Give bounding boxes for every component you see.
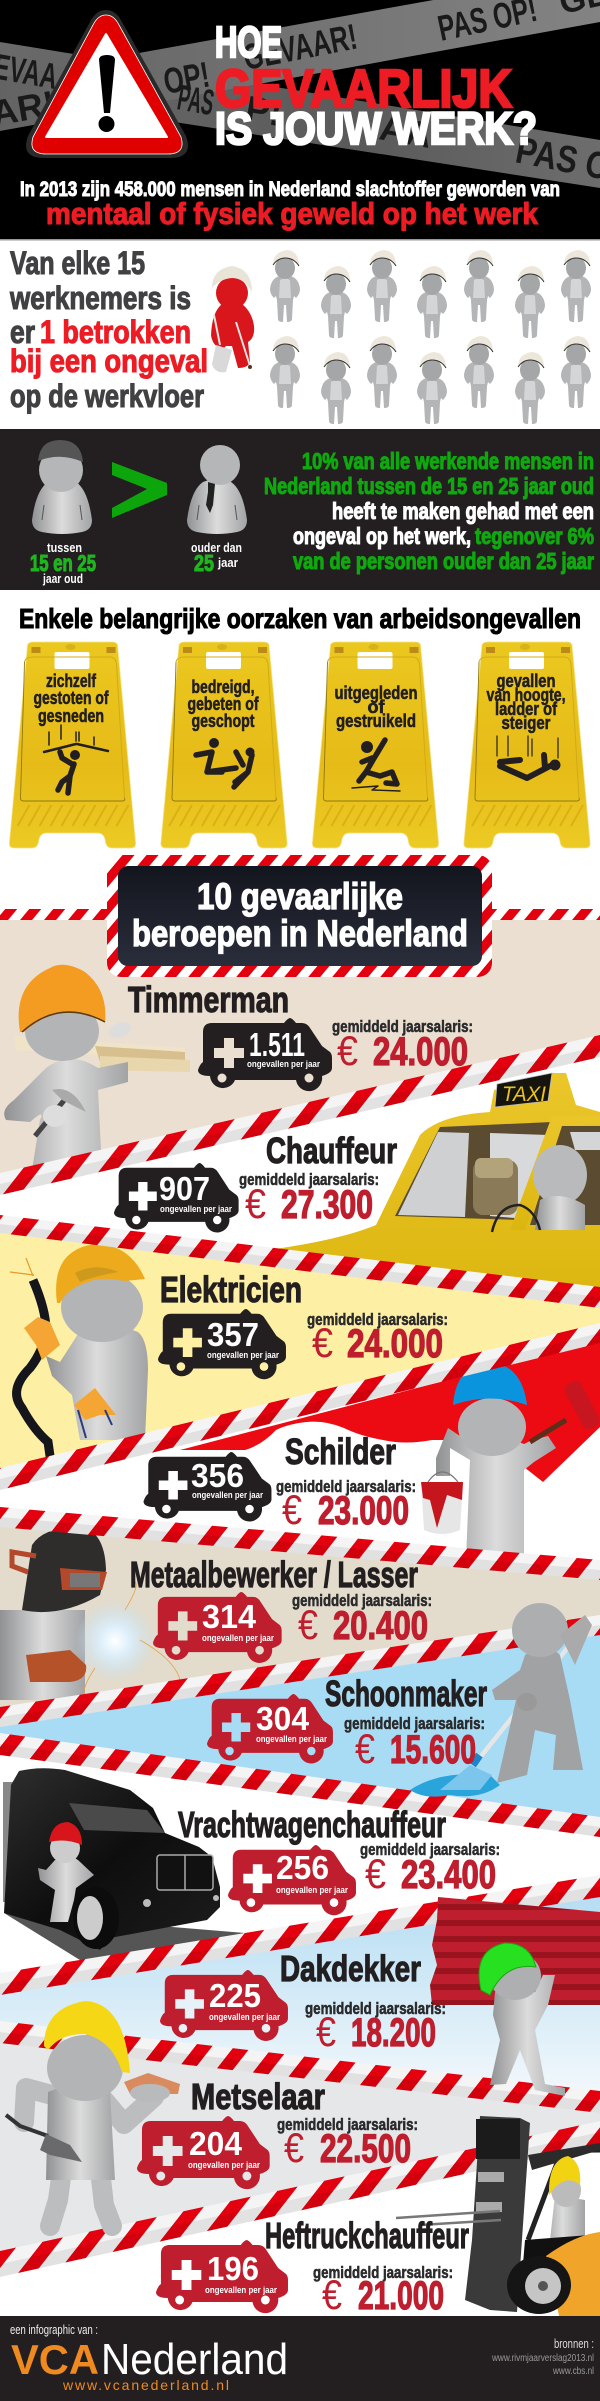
tape text: [0, 0, 600, 189]
ambulance badge: 314: [202, 1598, 257, 1635]
salary: gemiddeld jaarsalaris:: [360, 1840, 500, 1859]
label: 25 jaar: jaar: [217, 555, 238, 570]
sign text: bedreigd,: [192, 677, 254, 697]
occupation: Schoonmaker: [207, 1673, 487, 1772]
ambulance badge: 907: [159, 1170, 210, 1207]
salary: €: [245, 1180, 266, 1227]
salary: 24.000: [347, 1322, 443, 1366]
occupation: Schilder: Schilder: [285, 1431, 396, 1472]
sign text: steiger: [502, 713, 550, 733]
ambulance badge: 304: [256, 1700, 310, 1737]
tape text: P!: [243, 88, 285, 134]
salary: [277, 2115, 418, 2171]
occupation: Timmerman: [128, 979, 473, 1091]
tapes: [0, 909, 600, 2277]
salary: [344, 1714, 485, 1772]
salary: gemiddeld jaarsalaris:: [305, 1999, 446, 2018]
occupation: Schilder: [144, 1431, 416, 1533]
salary: [305, 1999, 446, 2055]
salary: 20.400: [333, 1604, 428, 1648]
label: 25 jaar: 25: [194, 550, 214, 576]
sign text: gebeten of: [188, 694, 259, 714]
title: HOE: [215, 18, 282, 67]
salary: [332, 1017, 473, 1074]
intro text: [20, 178, 560, 231]
occupation: Elektricien: Elektricien: [160, 1269, 302, 1310]
occupation: Metaalbewerker / Lasser: Metaalbewerker / Lasser: [130, 1554, 418, 1595]
salary: gemiddeld jaarsalaris:: [276, 1477, 416, 1496]
salary: gemiddeld jaarsalaris:: [239, 1170, 379, 1189]
illustration: truck: [3, 1768, 245, 1965]
occupation: Metselaar: Metselaar: [191, 2076, 325, 2117]
label: 15 en 25: [30, 540, 96, 586]
occupation: Chauffeur: [114, 1130, 397, 1232]
tape text: PAS: [175, 77, 217, 123]
illustration: bricklayer: [6, 2001, 180, 2226]
ambulance badge: ongevallen per jaar: [256, 1734, 327, 1745]
ambulance badge: ongevallen per jaar: [188, 2160, 260, 2171]
salary: [276, 1477, 416, 1533]
sources: [491, 2336, 594, 2377]
panel: cause sign 2: [161, 642, 287, 848]
salary: [313, 2263, 453, 2318]
sign text: gestruikeld: [336, 711, 416, 731]
sign text: ladder of: [495, 699, 558, 719]
salary: €: [284, 2124, 304, 2171]
icon: greater than arrow: [112, 462, 167, 518]
logo: [11, 2335, 288, 2393]
text: van elke 15: [9, 245, 208, 414]
salary: 23.000: [318, 1489, 409, 1533]
logo: Nederland: [101, 2335, 288, 2384]
ambulance badge: [158, 1309, 286, 1379]
salary: 22.500: [320, 2127, 411, 2171]
ambulance badge: ongevallen per jaar: [209, 2012, 280, 2023]
panel: cause sign 3: [312, 642, 439, 848]
occupation: Vrachtwagenchauffeur: Vrachtwagenchauffeur: [178, 1804, 446, 1845]
title: IS JOUW WERK?: [215, 103, 537, 154]
icon: kicking person: [196, 738, 254, 787]
occupation: Vrachtwagenchauffeur: [178, 1804, 500, 1915]
text: van elke 15: Van elke 15: [10, 245, 145, 281]
text: 10 percent statistic: [264, 448, 594, 574]
illustration: welder: [0, 1528, 180, 1700]
occupation: Dakdekker: [160, 1948, 446, 2055]
salary: [360, 1840, 500, 1897]
ambulance badge: [160, 1970, 288, 2041]
ambulance badge: [228, 1845, 356, 1915]
icon: warning triangle: [26, 10, 188, 158]
salary: €: [337, 1027, 358, 1074]
ambulance badge: [114, 1163, 239, 1232]
icon: injured red worker: [211, 266, 254, 372]
ambulance badge: 256: [276, 1849, 329, 1886]
background: occupation sections: [0, 920, 600, 2264]
sign text: geschopt: [192, 711, 254, 731]
truck driver: [38, 1822, 94, 1922]
title: [215, 18, 537, 154]
salary: €: [312, 1319, 333, 1366]
salary: gemiddeld jaarsalaris:: [313, 2263, 453, 2282]
occupation: Metaalbewerker / Lasser: [130, 1554, 432, 1663]
salary: €: [365, 1850, 386, 1897]
salary: gemiddeld jaarsalaris:: [277, 2115, 418, 2134]
occupation: Elektricien: [158, 1269, 448, 1379]
sign text: zichzelf: [46, 671, 97, 691]
salary: €: [282, 1486, 302, 1533]
ambulance badge: [144, 1452, 271, 1521]
footer intro: een infographic van :: [10, 2322, 98, 2337]
tape text: OP!: [160, 54, 213, 102]
limbs: [24, 2088, 154, 2226]
tape text: AA: [377, 107, 435, 156]
logo: VCA: [11, 2336, 99, 2383]
tape text: GEVAAR!: [240, 16, 360, 78]
ambulance badge: [137, 2116, 270, 2189]
ambulance badge: 357: [207, 1316, 259, 1353]
logo: www.vcanederland.nl: [62, 2377, 229, 2393]
ambulance badge: 204: [189, 2125, 243, 2162]
illustration: taxi: [268, 1073, 600, 1300]
ambulance badge: [198, 1018, 332, 1091]
icon: slipping person: [352, 740, 400, 791]
illustration: painter: [421, 1362, 600, 1560]
ambulance badge: [207, 1694, 333, 1763]
ambulance badge: ongevallen per jaar: [247, 1059, 320, 1070]
salary: [292, 1591, 432, 1648]
label: 25 jaar: [191, 540, 242, 576]
icon: grey workers: [270, 250, 591, 424]
header panel: [0, 0, 600, 240]
salary: 18.200: [351, 2011, 436, 2055]
ambulance badge: 1.511: [249, 1026, 305, 1063]
spark: [75, 1582, 180, 1700]
ambulance badge: ongevallen per jaar: [192, 1490, 263, 1501]
ambulance badge: ongevallen per jaar: [205, 2285, 277, 2296]
panel: 1 in 15 workers: [9, 245, 591, 424]
ambulance badge: 196: [207, 2250, 259, 2287]
footer: [0, 2316, 600, 2401]
text: van elke 15: 1 betrokken: [40, 314, 191, 350]
icon: person hitting head: [44, 725, 108, 793]
salary: €: [322, 2271, 342, 2318]
label: 15 en 25: jaar oud: [42, 571, 83, 586]
illustration: roofer: [479, 1943, 565, 2096]
salary: €: [298, 1601, 318, 1648]
text: van elke 15: op de werkvloer: [10, 378, 204, 414]
illustration: cleaner: [410, 1603, 592, 1797]
icon: older worker with tie: [187, 445, 247, 534]
sign text: uitgegleden: [334, 683, 418, 703]
occupation: Heftruckchauffeur: Heftruckchauffeur: [265, 2215, 469, 2256]
title: GEVAARLIJK: [215, 59, 512, 119]
salary: 21.000: [358, 2274, 444, 2318]
ambulance badge: ongevallen per jaar: [276, 1885, 348, 1896]
warning tape: band B: [0, 42, 600, 188]
salary: 27.300: [281, 1183, 373, 1227]
text: van elke 15: bij een ongeval: [10, 343, 208, 379]
salary: gemiddeld jaarsalaris:: [332, 1017, 473, 1036]
illustration: roof: [430, 1897, 600, 2005]
sign text: of: [368, 697, 385, 717]
box heading: 10 gevaarlijke: [197, 876, 403, 917]
occupation: Heftruckchauffeur: [156, 2215, 469, 2318]
occupation: Dakdekker: Dakdekker: [280, 1948, 421, 1989]
ambulance badge: ongevallen per jaar: [202, 1633, 274, 1644]
warning tape: band A: [0, 0, 600, 131]
occupation: Metselaar: [137, 2076, 418, 2189]
occupation: Schoonmaker: Schoonmaker: [325, 1673, 487, 1714]
salary: €: [355, 1725, 375, 1772]
icon: falling person: [497, 736, 560, 778]
text: van elke 15: werknemers is: [9, 280, 191, 316]
salary: gemiddeld jaarsalaris:: [292, 1591, 432, 1610]
ambulance badge: 225: [209, 1977, 261, 2014]
intro text: mentaal of fysiek geweld op het werk: [46, 196, 539, 231]
sign text: gestoten of: [34, 688, 109, 708]
icon: young worker: [32, 440, 92, 534]
salary: [239, 1170, 379, 1227]
illustration: taxi: TAXI: [502, 1083, 546, 1106]
panel: cause sign 1: [9, 642, 136, 848]
text: 10 percent statistic: ongeval op het werk,: [293, 523, 471, 549]
salary: [307, 1310, 448, 1366]
sign text: gesneden: [38, 706, 104, 726]
panel: title box occupations: [107, 855, 492, 977]
label: 15 en 25: tussen: [47, 540, 82, 555]
salary: gemiddeld jaarsalaris:: [307, 1310, 448, 1329]
ambulance badge: ongevallen per jaar: [160, 1204, 232, 1215]
ambulance badge: [153, 1592, 282, 1663]
salary: 24.000: [373, 1030, 468, 1074]
illustration: forklift: [396, 2116, 600, 2320]
sign text: van hoogte,: [486, 685, 566, 705]
sign text: [34, 671, 109, 726]
salary: 23.400: [401, 1853, 496, 1897]
ambulance badge: [156, 2240, 288, 2313]
ambulance badge: ongevallen per jaar: [207, 1350, 279, 1361]
label: 25 jaar: ouder dan: [191, 540, 242, 555]
box heading line 2: beroepen in Nederland: [132, 913, 468, 954]
sign text: [188, 677, 259, 731]
sign text: [334, 683, 418, 731]
salary: gemiddeld jaarsalaris:: [344, 1714, 485, 1733]
salary: €: [316, 2008, 336, 2055]
panel: age comparison: [0, 429, 600, 590]
illustration: red paint splash: [180, 1340, 600, 1482]
panel: cause sign 4: [464, 642, 590, 848]
ambulance badge: 356: [191, 1457, 244, 1494]
sign text: gevallen: [496, 671, 556, 691]
label: 15 en 25: 15 en 25: [30, 550, 96, 576]
occupation: Chauffeur: Chauffeur: [266, 1130, 397, 1171]
sign text: [486, 671, 566, 733]
illustration: carpenter: [4, 965, 190, 1170]
illustration: electrician: [10, 1244, 148, 1470]
text: van elke 15: er: [10, 314, 35, 350]
occupation: Timmerman: Timmerman: [128, 979, 289, 1020]
salary: 15.600: [390, 1728, 476, 1772]
